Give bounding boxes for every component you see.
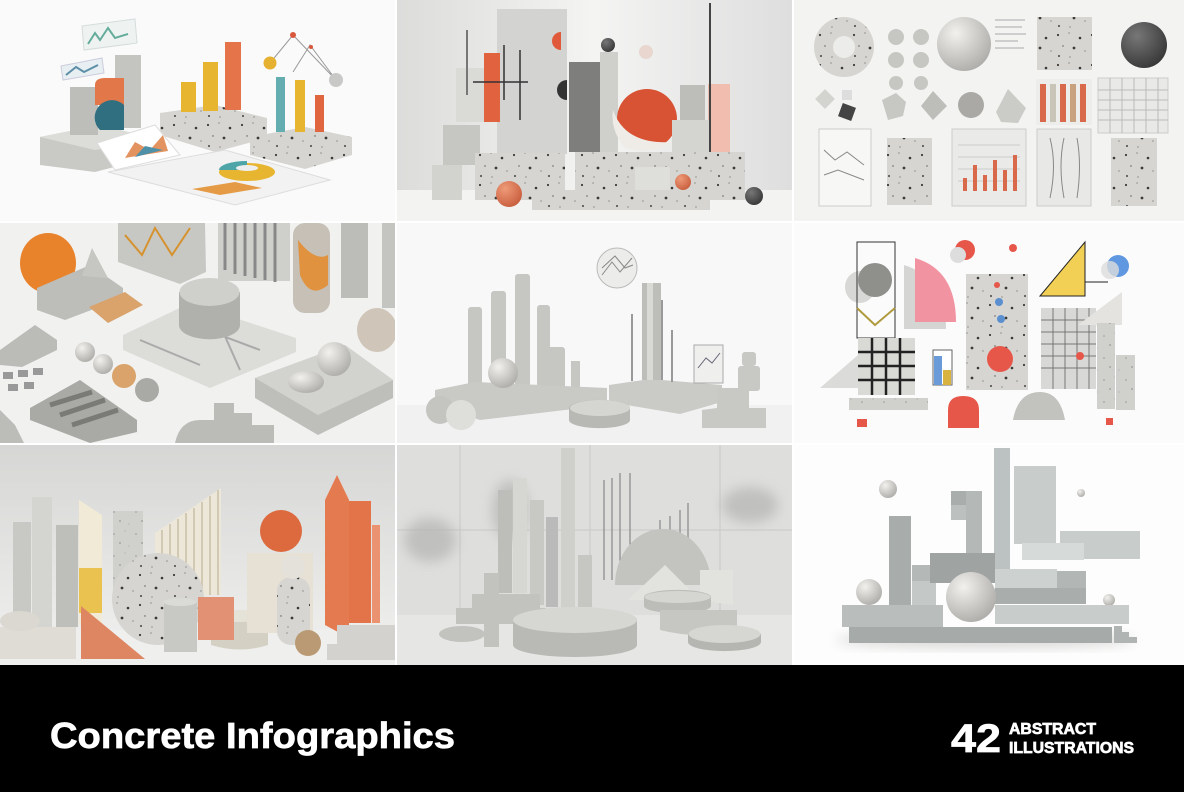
- concrete base with towers: [40, 55, 141, 172]
- large half disc: [615, 529, 733, 605]
- right pillars: [1078, 292, 1135, 410]
- caption: ILLUSTRATIONS: [1009, 740, 1134, 757]
- stepped blocks bottom: [0, 368, 274, 443]
- bottom forms: [849, 392, 1113, 428]
- base slabs: [842, 605, 1129, 643]
- ribbed cream fan: [155, 488, 221, 595]
- footer bar: [0, 665, 1184, 792]
- speckled platform and left bars: [160, 42, 267, 152]
- right plinths: [644, 590, 761, 651]
- text note: [995, 20, 1026, 48]
- left blocks: [0, 248, 143, 367]
- small cubes and polyhedra: [815, 89, 1026, 123]
- central speckled slab: [966, 274, 1028, 390]
- spheres: [496, 38, 763, 207]
- orange circle and wall blocks: [20, 223, 290, 293]
- black grid block: [820, 338, 915, 395]
- upper concrete slabs: [951, 448, 1140, 570]
- wall dial: [597, 248, 637, 288]
- panel: flat lay of concrete shapes and charts: [794, 0, 1184, 221]
- panel: colourful geometric shapes: [820, 240, 1135, 428]
- grid chart card: [1098, 78, 1168, 133]
- paper documents and donut: [97, 125, 330, 205]
- floating network dots: [264, 32, 343, 87]
- orange disc on pedestal: [247, 510, 313, 633]
- small discs grid: [888, 29, 929, 90]
- base slabs: [435, 379, 722, 428]
- red half sphere: [612, 89, 677, 144]
- blue beaker chart: [933, 350, 952, 385]
- orange bar chart card: [1040, 84, 1086, 122]
- panel: isometric bar charts on concrete blocks: [40, 18, 352, 206]
- wall stains: [404, 480, 778, 562]
- speckled platform and right bars: [250, 77, 352, 169]
- tall bars: [498, 448, 688, 608]
- panel: warm studio composition: [0, 445, 396, 665]
- grid block: [1041, 308, 1096, 389]
- caption: ABSTRACT: [1009, 721, 1097, 738]
- small stairs: [1114, 626, 1137, 643]
- orange towers: [325, 475, 380, 638]
- soft floor shadow: [835, 632, 1135, 648]
- floating chart cards: [61, 19, 137, 80]
- orange marble column: [293, 223, 396, 313]
- sphere with frame and chevron: [845, 242, 895, 338]
- speckled square top: [1037, 17, 1092, 70]
- panel: grey concrete wall with columns: [397, 445, 792, 665]
- count: 42: [951, 717, 1001, 761]
- right side blocks: [702, 352, 766, 428]
- steps and columns left: [439, 573, 546, 647]
- middle slabs: [995, 569, 1086, 604]
- caption: [1009, 721, 1134, 757]
- large spheres: [937, 17, 1167, 71]
- document and speckled cards bottom row: [819, 129, 1157, 206]
- panel: abstract concrete city composition: [397, 0, 792, 221]
- tall concrete towers: [13, 497, 143, 627]
- spheres and cylinders: [426, 358, 518, 430]
- panel: concrete columns on white: [397, 248, 792, 443]
- salmon blocks and triangle: [0, 597, 234, 659]
- column group: [468, 274, 580, 390]
- tall center columns and rods: [632, 283, 723, 383]
- speckled post with balls: [277, 555, 321, 656]
- stepped speckled blocks: [432, 120, 745, 210]
- speckled disc and cylinder: [112, 553, 268, 652]
- tall concrete slabs: [456, 3, 730, 154]
- pink quarter shape: [904, 258, 956, 329]
- panel: isometric marble blocks: [0, 223, 397, 443]
- title: Concrete Infographics: [50, 715, 455, 756]
- marble slab and cylinder: [123, 278, 296, 388]
- spheres: [856, 480, 1115, 622]
- panel: white studio concrete composition: [794, 445, 1184, 665]
- central round plinth: [513, 607, 637, 657]
- red floating dots: [950, 240, 1017, 263]
- yellow triangle: [1040, 242, 1129, 296]
- concrete ring: [814, 17, 874, 77]
- stepped slabs: [327, 625, 396, 660]
- left column and steps: [889, 516, 995, 605]
- small spheres: [75, 342, 159, 402]
- right block with spheres: [255, 308, 397, 435]
